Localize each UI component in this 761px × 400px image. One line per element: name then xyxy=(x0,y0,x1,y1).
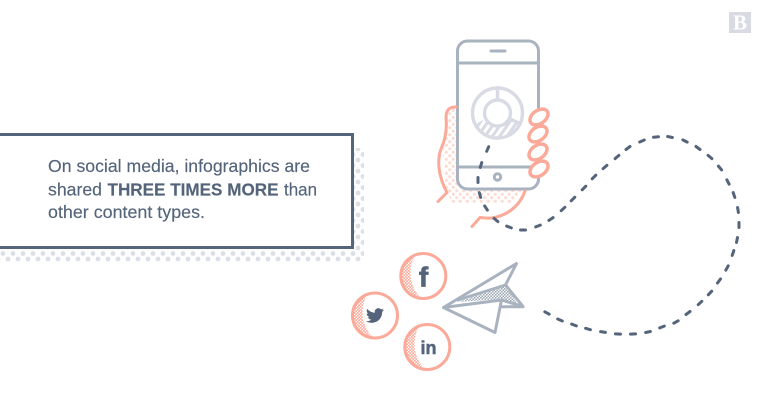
callout panel xyxy=(0,134,352,248)
social icon: linkedin xyxy=(404,324,450,370)
phone home button xyxy=(494,174,501,180)
callout text: THREE TIMES MORE xyxy=(108,180,278,200)
logo badge xyxy=(729,10,751,34)
social icon: twitter xyxy=(352,293,398,338)
callout text: shared xyxy=(48,180,102,200)
plane dotted fold xyxy=(458,286,518,304)
callout text: other content types. xyxy=(48,202,205,222)
social icon: linkedin: in xyxy=(420,338,436,358)
hand outline xyxy=(438,106,551,226)
social icon: facebook xyxy=(400,254,446,298)
phone speaker xyxy=(491,50,505,52)
social icon: facebook: f xyxy=(419,262,429,292)
callout text xyxy=(48,156,317,222)
callout shadow: dot pattern xyxy=(0,148,364,262)
logo badge: B xyxy=(733,10,747,34)
phone xyxy=(458,41,538,189)
hand dotted shading xyxy=(443,108,525,203)
callout text: than xyxy=(284,180,317,200)
donut chart on phone xyxy=(472,88,522,138)
paper plane xyxy=(444,264,523,332)
callout text: On social media, infographics are xyxy=(48,156,310,176)
dashed flight path arrow xyxy=(478,136,739,334)
fingers xyxy=(526,106,551,180)
